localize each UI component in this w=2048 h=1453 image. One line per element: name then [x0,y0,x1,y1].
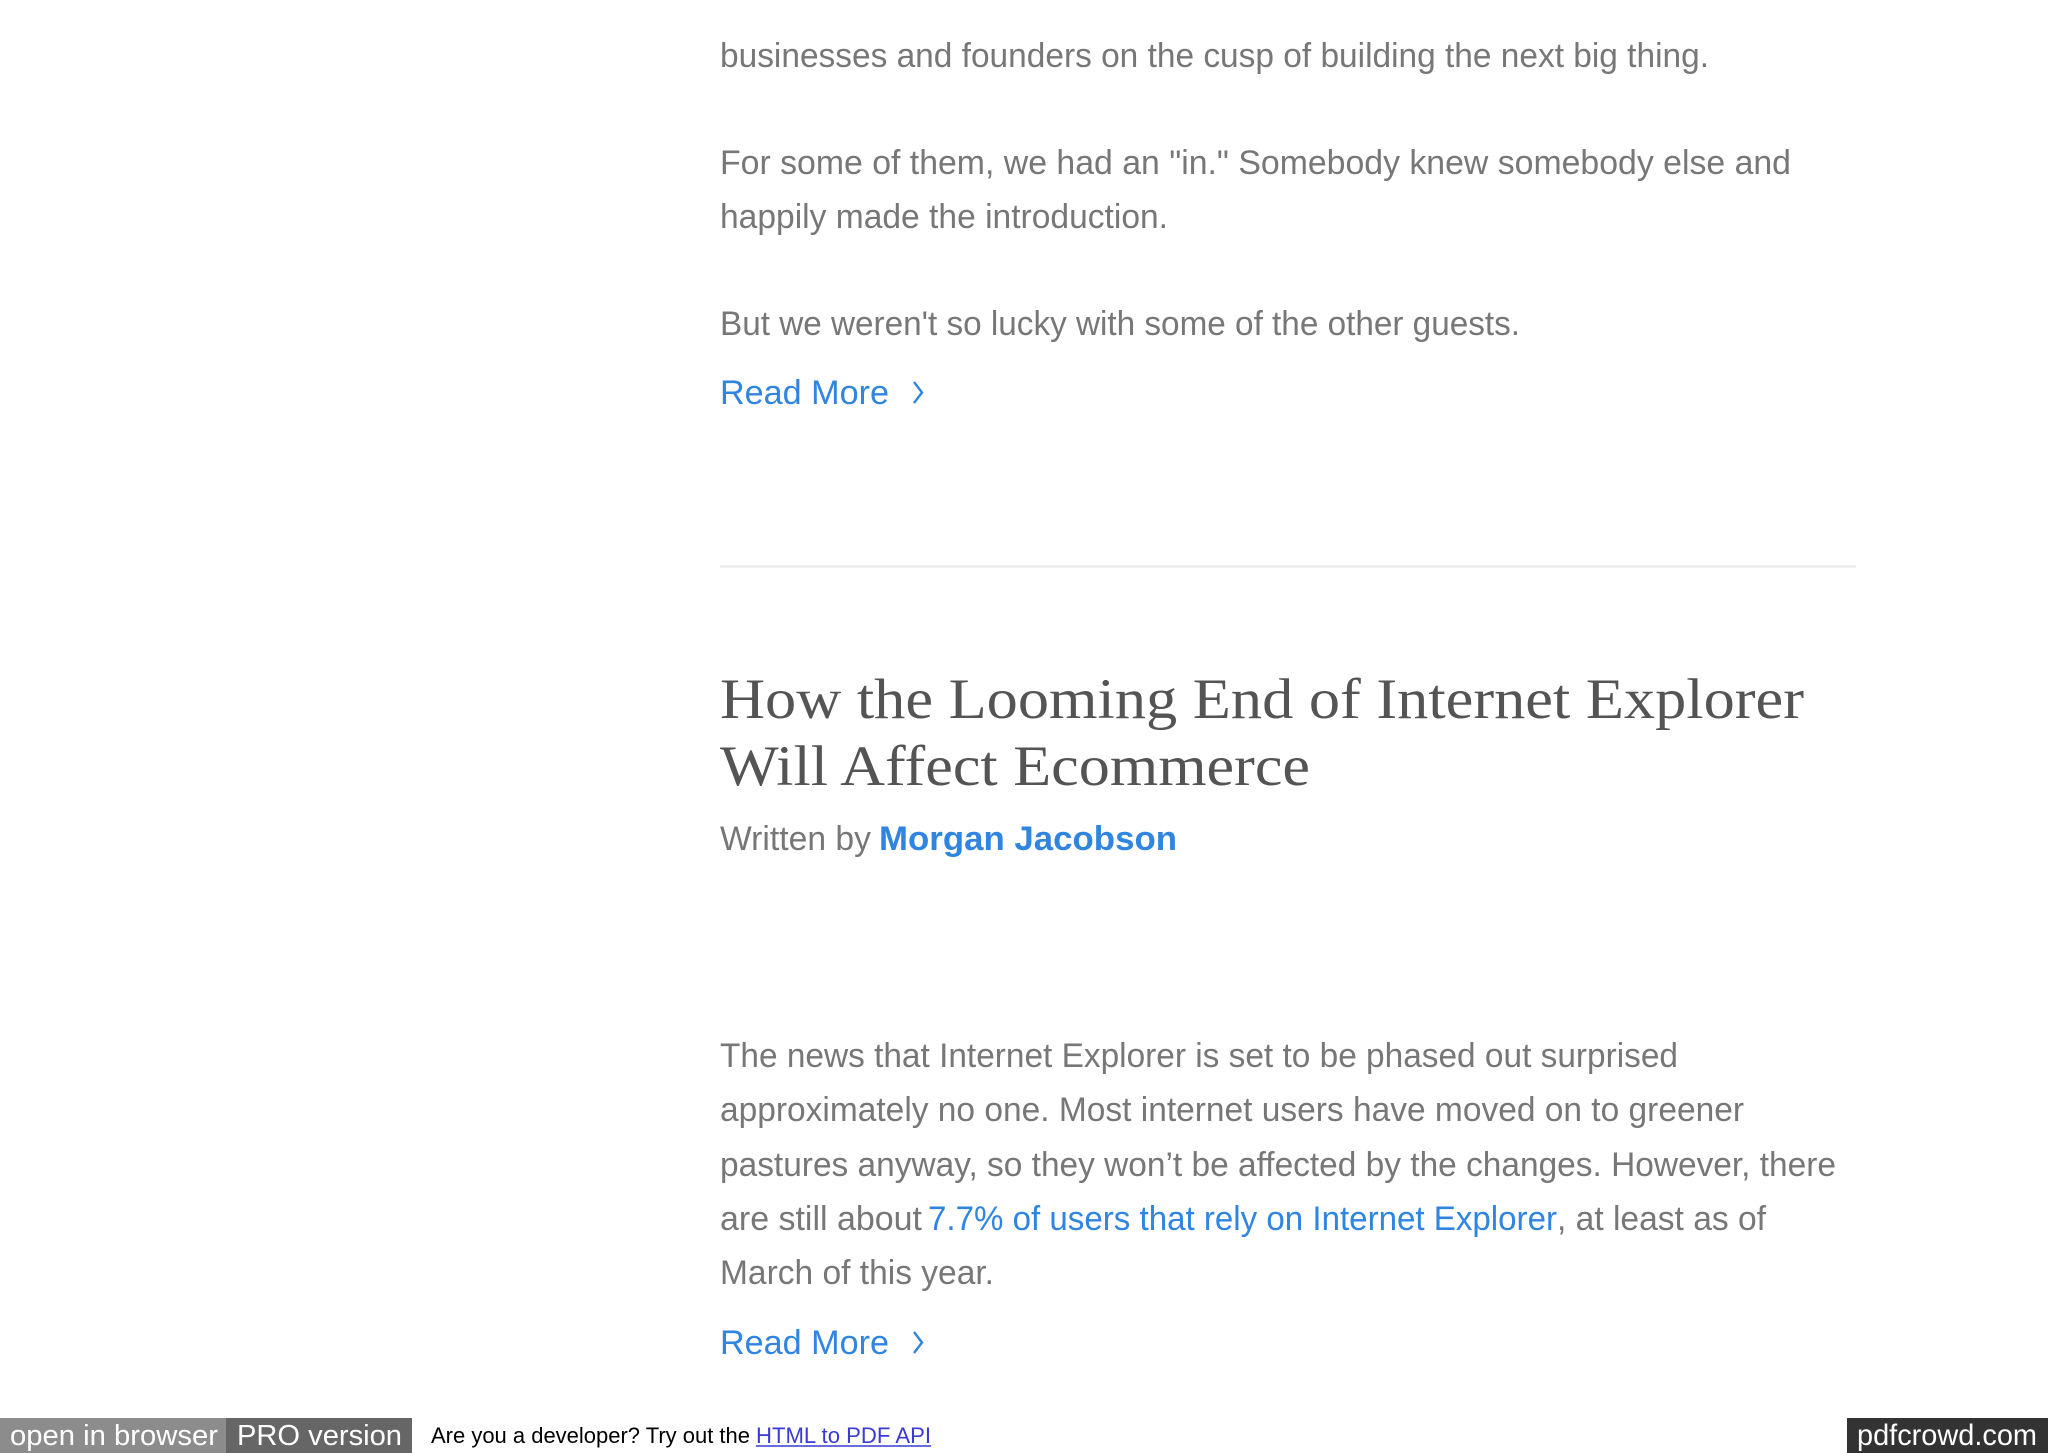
text block: previous article ending: For some of them, we had an "in." Somebody knew somebody else and [720,144,1791,182]
text block: article intro: March of this year. [720,1254,994,1292]
text block: article intro: are still about [720,1200,922,1238]
byline: Morgan Jacobson [879,820,1177,858]
heading: article title: Will Affect Ecommerce [720,735,1310,798]
byline [720,820,1177,858]
text block: article intro: pastures anyway, so they won’t be affected by the changes. However, there [720,1146,1836,1184]
read more link: previous article: Read More [720,374,889,412]
text block: previous article ending: happily made the introduction. [720,198,1168,236]
byline: Written by [720,820,872,858]
text block: previous article ending: But we weren't so lucky with some of the other guests. [720,305,1520,343]
heading: article title: How the Looming End of Internet Explorer [720,668,1804,731]
text block: article intro: , at least as of [1557,1200,1766,1238]
footer button: PRO version: PRO version [237,1420,402,1452]
footer promo text: Are you a developer? Try out the [431,1423,750,1448]
text block: article intro: The news that Internet Explorer is set to be phased out surprised [720,1037,1678,1075]
read more link: article: Read More [720,1324,889,1362]
footer button: open in browser: open in browser [10,1420,218,1452]
footer promo text: HTML to PDF API [756,1423,931,1448]
footer badge: pdfcrowd.com: pdfcrowd.com [1857,1419,2037,1452]
footer promo text [431,1423,931,1448]
text block: previous article ending [720,37,1791,343]
text block: article intro [720,1037,1836,1292]
text block: article intro: 7.7% of users that rely on Internet Explorer [928,1200,1557,1238]
heading: article title [720,668,1804,798]
text block: article intro: approximately no one. Most internet users have moved on to greener [720,1091,1744,1129]
text block: previous article ending: businesses and founders on the cusp of building the next big thing. [720,37,1709,75]
